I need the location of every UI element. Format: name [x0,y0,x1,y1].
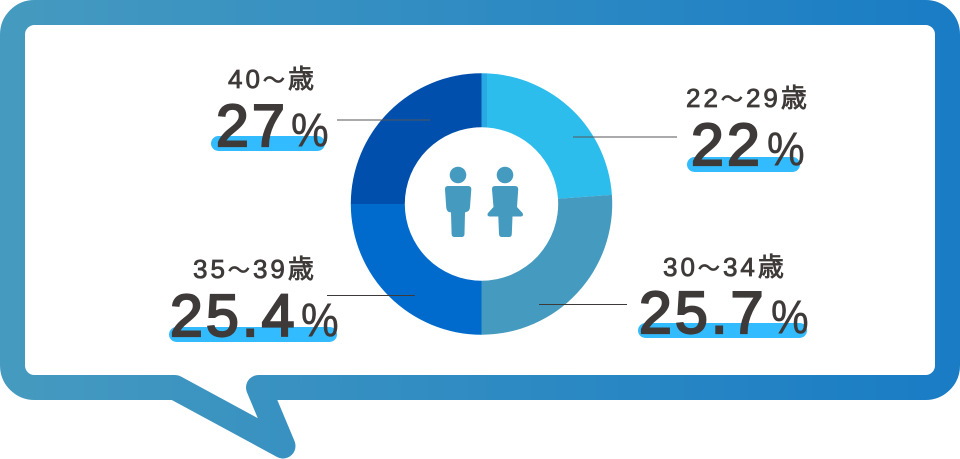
callout: 40~ [211,64,329,159]
icon: man [445,167,471,237]
slice: 30~34 [482,195,612,335]
callout: 30~34: 25.7 [639,280,767,346]
callout: 35~39: 25.4 [170,283,298,349]
leader line: 35~39 [327,294,415,296]
slice: 35~39 [351,204,482,335]
donut chart [351,73,612,335]
leader line: 22~29 [573,136,677,138]
callout: 35~39: 35〜39歳 [193,254,317,284]
callout: 22~29: 22 [691,112,763,178]
callout: 40~: % [291,105,329,157]
callout: 35~39 [169,254,339,349]
leader line: 40~ [337,119,430,121]
slice: other [482,73,487,128]
callout: 35~39: % [301,295,339,347]
callout: 22~29 [686,83,810,178]
callout: 30~34: 30〜34歳 [663,252,787,282]
callout: 22~29: 22〜29歳 [686,83,810,113]
callout: 22~29: % [767,124,805,176]
callout: 40~: 27 [216,93,288,159]
callout: 40~: 40〜歳 [228,64,317,94]
icon: woman [488,167,523,237]
callout: 30~34: % [771,292,809,344]
slice: 40~ [351,73,482,204]
leader line: 30~34 [539,304,627,306]
slice: 22~29 [487,73,612,199]
callout: 30~34 [638,252,809,346]
